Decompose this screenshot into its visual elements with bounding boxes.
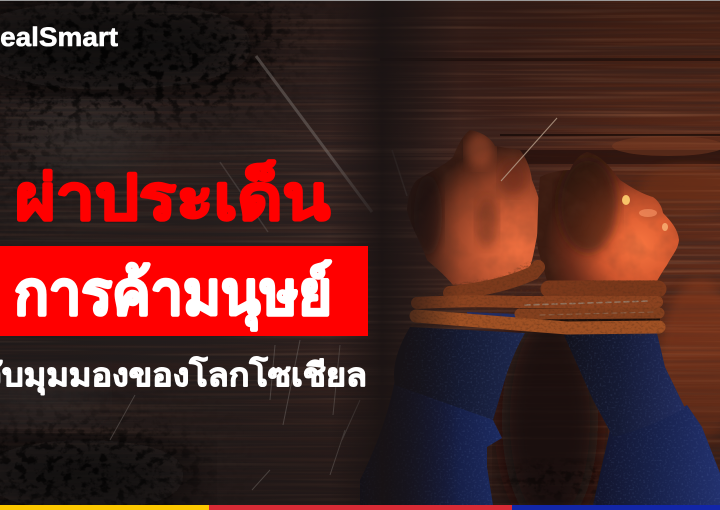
right fist xyxy=(537,152,679,281)
right cuff xyxy=(563,333,685,437)
scratches xyxy=(110,56,407,490)
left fist xyxy=(407,130,541,285)
red banner xyxy=(0,246,368,336)
right folded sleeve xyxy=(593,405,720,505)
rope xyxy=(408,258,668,340)
left cuff xyxy=(394,327,525,420)
left folded sleeve xyxy=(360,380,502,505)
top edge line xyxy=(0,0,720,1)
bottom colour bar xyxy=(0,505,720,510)
hands xyxy=(400,118,685,290)
left shade over hands xyxy=(330,0,460,505)
sleeves xyxy=(360,320,720,510)
heading line 1: ผ่าประเด็น xyxy=(15,160,330,233)
heading line 2: การค้ามนุษย์ xyxy=(14,260,332,331)
